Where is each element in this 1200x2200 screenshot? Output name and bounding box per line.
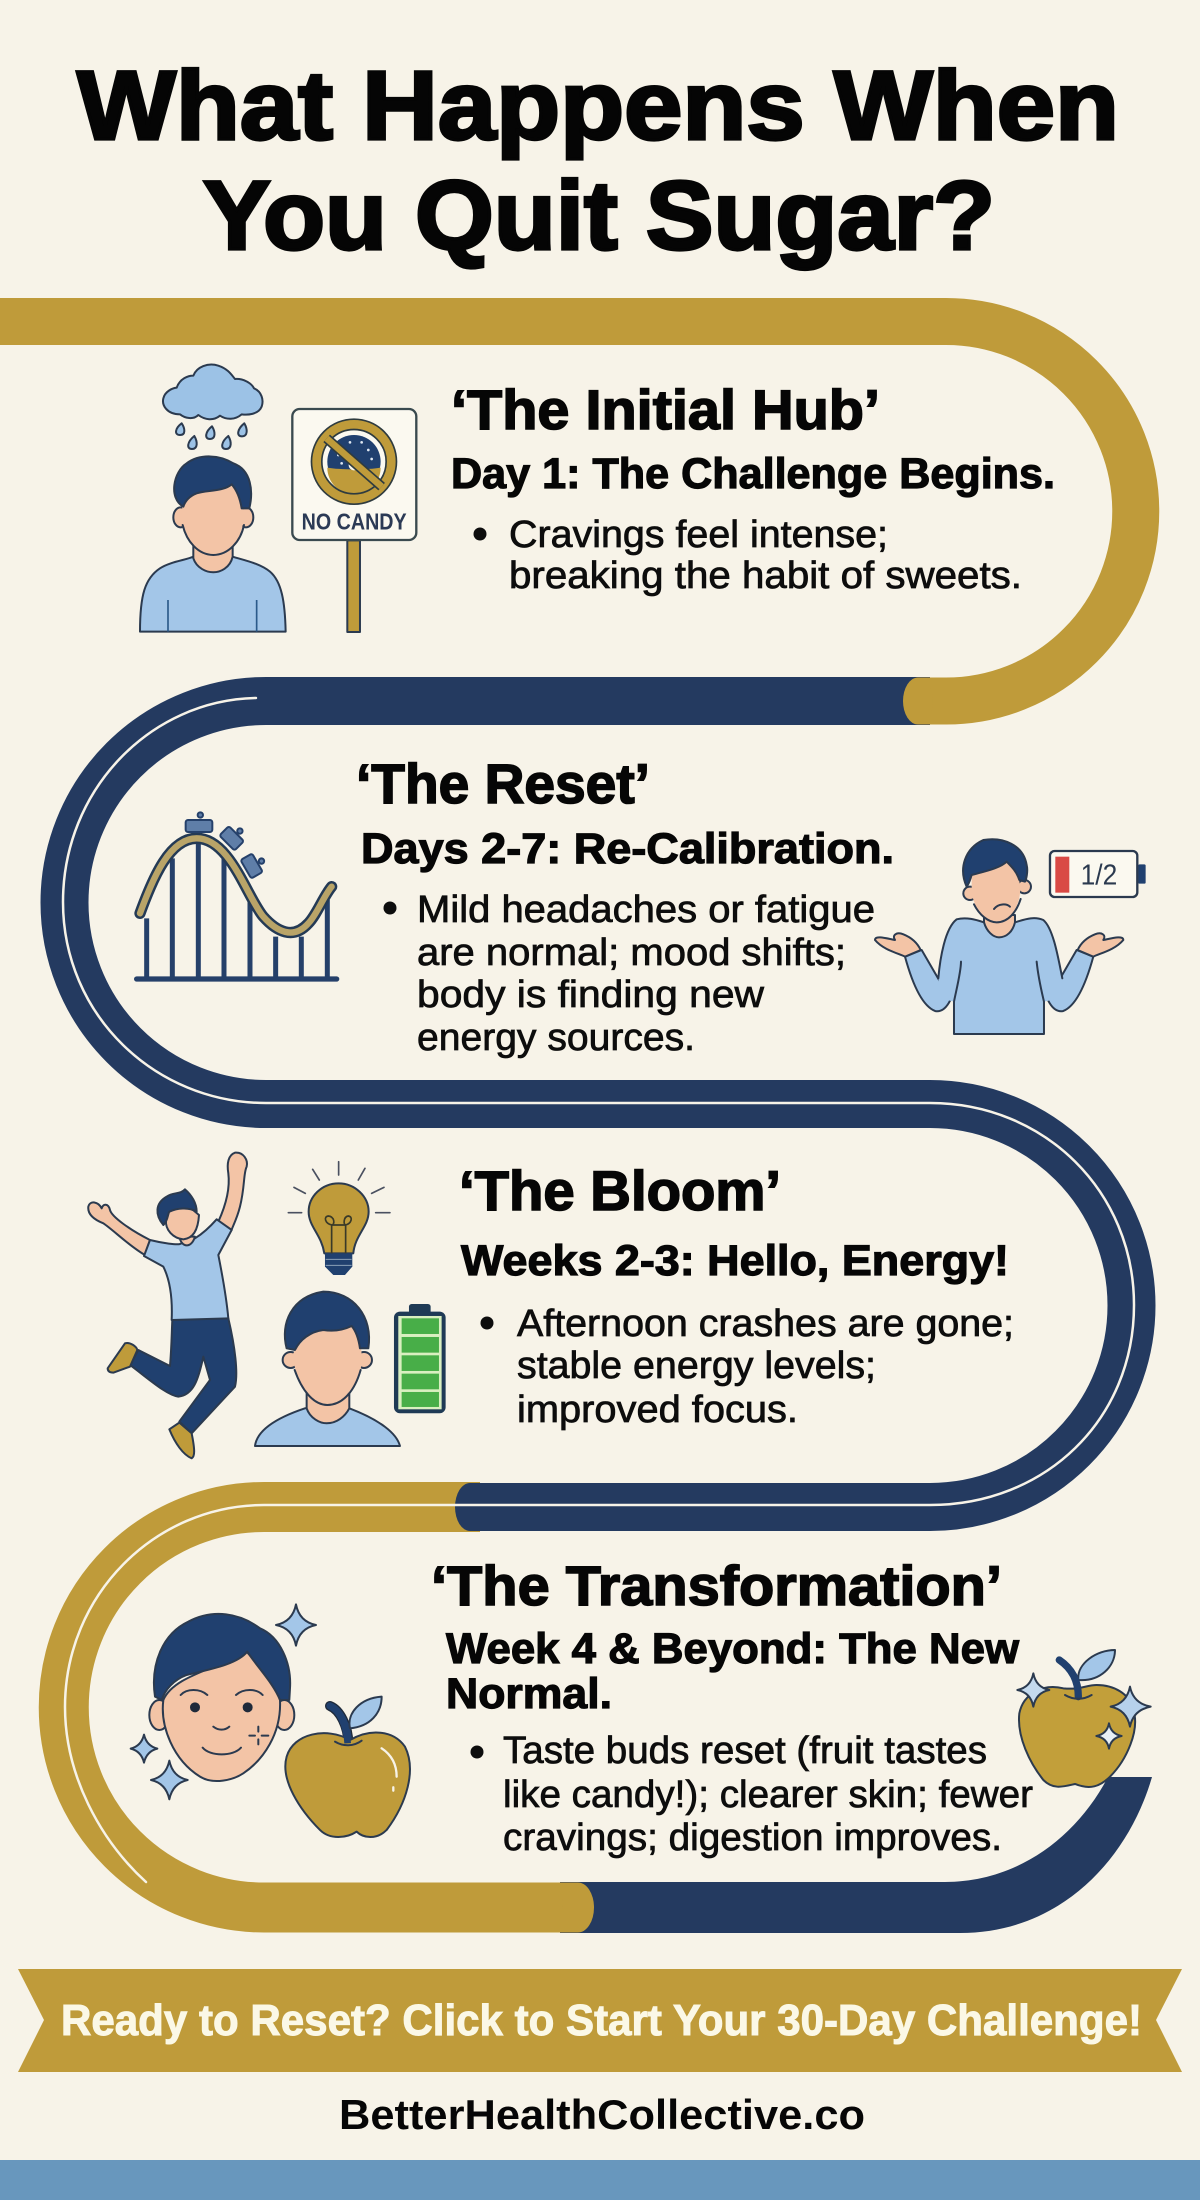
bullet text: weeks 2-3: stable energy levels; bbox=[517, 1345, 876, 1387]
icon: sad person under rain cloud bbox=[140, 365, 286, 632]
call to action banner bbox=[18, 1969, 1182, 2072]
subheading: days 2-7: Days 2-7: Re-Calibration. bbox=[361, 825, 894, 873]
banner text: Ready to Reset? Click to Start Your 30-Day Challenge! bbox=[61, 1996, 1142, 2045]
subheading: weeks 2-3: Weeks 2-3: Hello, Energy! bbox=[461, 1237, 1009, 1285]
subheading: week 4 and beyond bbox=[446, 1625, 1020, 1718]
heading: the reset: ‘The Reset’ bbox=[356, 752, 650, 815]
bullet text: week 4 and beyond: Taste buds reset (fruit tastes bbox=[503, 1730, 987, 1772]
heading: the transformation: ‘The Transformation’ bbox=[431, 1554, 1002, 1617]
track: top gold segment bbox=[0, 322, 1136, 724]
icon: sparkling apple bbox=[1017, 1650, 1151, 1787]
icon: smiling face with sparkles bbox=[131, 1604, 316, 1799]
subheading: day 1: Day 1: The Challenge Begins. bbox=[451, 450, 1055, 498]
bottom colour strip bbox=[0, 2160, 1200, 2200]
track: final navy segment bbox=[560, 1777, 1152, 1933]
heading: the initial hub: ‘The Initial Hub’ bbox=[451, 378, 880, 441]
bullet text: day 1: Cravings feel intense; bbox=[509, 514, 888, 556]
subheading: week 4 and beyond: Week 4 & Beyond: The New bbox=[446, 1625, 1020, 1673]
footer website: BetterHealthCollective.co bbox=[339, 2091, 865, 2138]
bullet text: week 4 and beyond: like candy!); clearer skin; fewer bbox=[503, 1774, 1033, 1816]
panel: the transformation bbox=[131, 1554, 1151, 1859]
icon: half battery bbox=[1050, 851, 1146, 897]
icon: half battery: 1/2 bbox=[1081, 859, 1117, 891]
panel: the initial hub bbox=[140, 365, 1055, 632]
title bbox=[77, 51, 1119, 270]
bullet text: days 2-7: Mild headaches or fatigue bbox=[417, 889, 875, 931]
bullet text: week 4 and beyond bbox=[470, 1730, 1033, 1859]
track: lower gold segment bbox=[64, 1507, 594, 1932]
icon: no candy sign bbox=[292, 409, 416, 632]
title: You Quit Sugar? bbox=[203, 161, 995, 270]
bullet text: days 2-7: body is finding new bbox=[417, 974, 765, 1016]
icon: no candy sign: NO CANDY bbox=[302, 508, 407, 534]
winding path track bbox=[0, 322, 1152, 1933]
icon: happy person portrait bbox=[255, 1292, 400, 1446]
subheading: week 4 and beyond: Normal. bbox=[446, 1670, 612, 1718]
bullet text: day 1 bbox=[474, 514, 1022, 597]
heading: the bloom: ‘The Bloom’ bbox=[459, 1159, 781, 1222]
bullet text: weeks 2-3 bbox=[480, 1303, 1014, 1431]
bullet text: weeks 2-3: improved focus. bbox=[517, 1389, 798, 1431]
icon: shrugging person bbox=[875, 839, 1123, 1034]
icon: jumping person bbox=[88, 1153, 247, 1458]
bullet text: weeks 2-3: Afternoon crashes are gone; bbox=[517, 1303, 1014, 1345]
track: navy middle segment bbox=[64, 701, 1131, 1531]
bullet text: days 2-7: energy sources. bbox=[417, 1017, 695, 1059]
track: white centre hairline bbox=[63, 698, 1134, 1882]
bullet text: days 2-7: are normal; mood shifts; bbox=[417, 932, 846, 974]
icon: roller coaster bbox=[137, 812, 337, 979]
bullet text: days 2-7 bbox=[384, 889, 875, 1059]
icon: light bulb bbox=[288, 1162, 390, 1275]
bullet text: week 4 and beyond: cravings; digestion improves. bbox=[503, 1817, 1002, 1859]
icon: full battery bbox=[394, 1304, 446, 1413]
icon: golden apple bbox=[285, 1697, 410, 1837]
panel: the bloom bbox=[88, 1153, 1014, 1458]
title: What Happens When bbox=[77, 51, 1119, 160]
bullet text: day 1: breaking the habit of sweets. bbox=[509, 555, 1022, 597]
panel: the reset bbox=[137, 752, 1146, 1059]
banner ribbon bbox=[18, 1969, 1182, 2072]
